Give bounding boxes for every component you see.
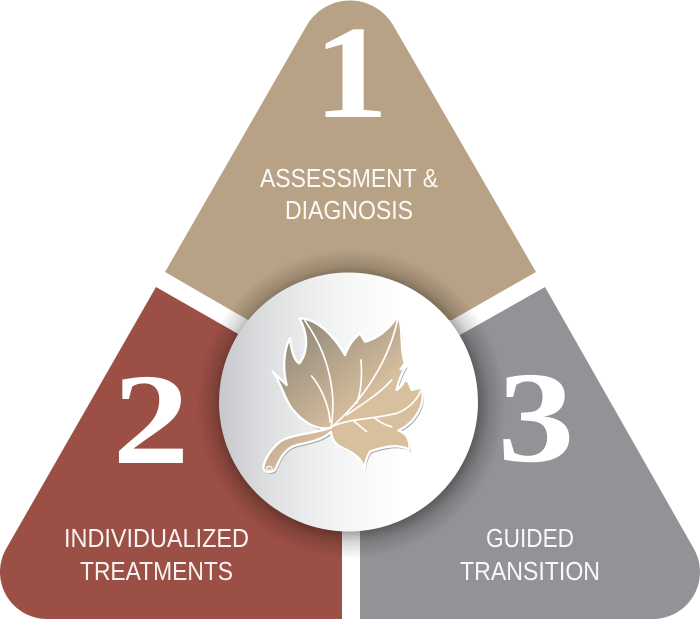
stem end <box>266 466 273 471</box>
center disc <box>219 272 478 532</box>
leaf body <box>263 315 423 472</box>
leaf veins <box>305 317 422 432</box>
label: guided transition: TRANSITION <box>460 556 600 586</box>
circle shadow <box>196 249 506 559</box>
label: individualized treatments: INDIVIDUALIZED <box>64 523 249 553</box>
panel: step 3 transition <box>360 287 700 619</box>
label: assessment and diagnosis <box>260 163 438 225</box>
number 1: 1 <box>314 0 388 146</box>
panel: step 2 treatments <box>0 287 342 619</box>
label: guided transition <box>460 523 600 586</box>
label: individualized treatments: TREATMENTS <box>80 556 233 586</box>
number 2: 2 <box>112 348 190 492</box>
label: assessment and diagnosis: DIAGNOSIS <box>285 195 413 225</box>
panel: step 1 assessment <box>165 1 536 320</box>
label: assessment and diagnosis: ASSESSMENT & <box>260 163 438 193</box>
leaf shadow <box>265 317 424 474</box>
label: guided transition: GUIDED <box>486 523 574 553</box>
icon: leaf <box>263 315 424 474</box>
label: individualized treatments <box>64 523 249 586</box>
number 3: 3 <box>498 346 574 490</box>
